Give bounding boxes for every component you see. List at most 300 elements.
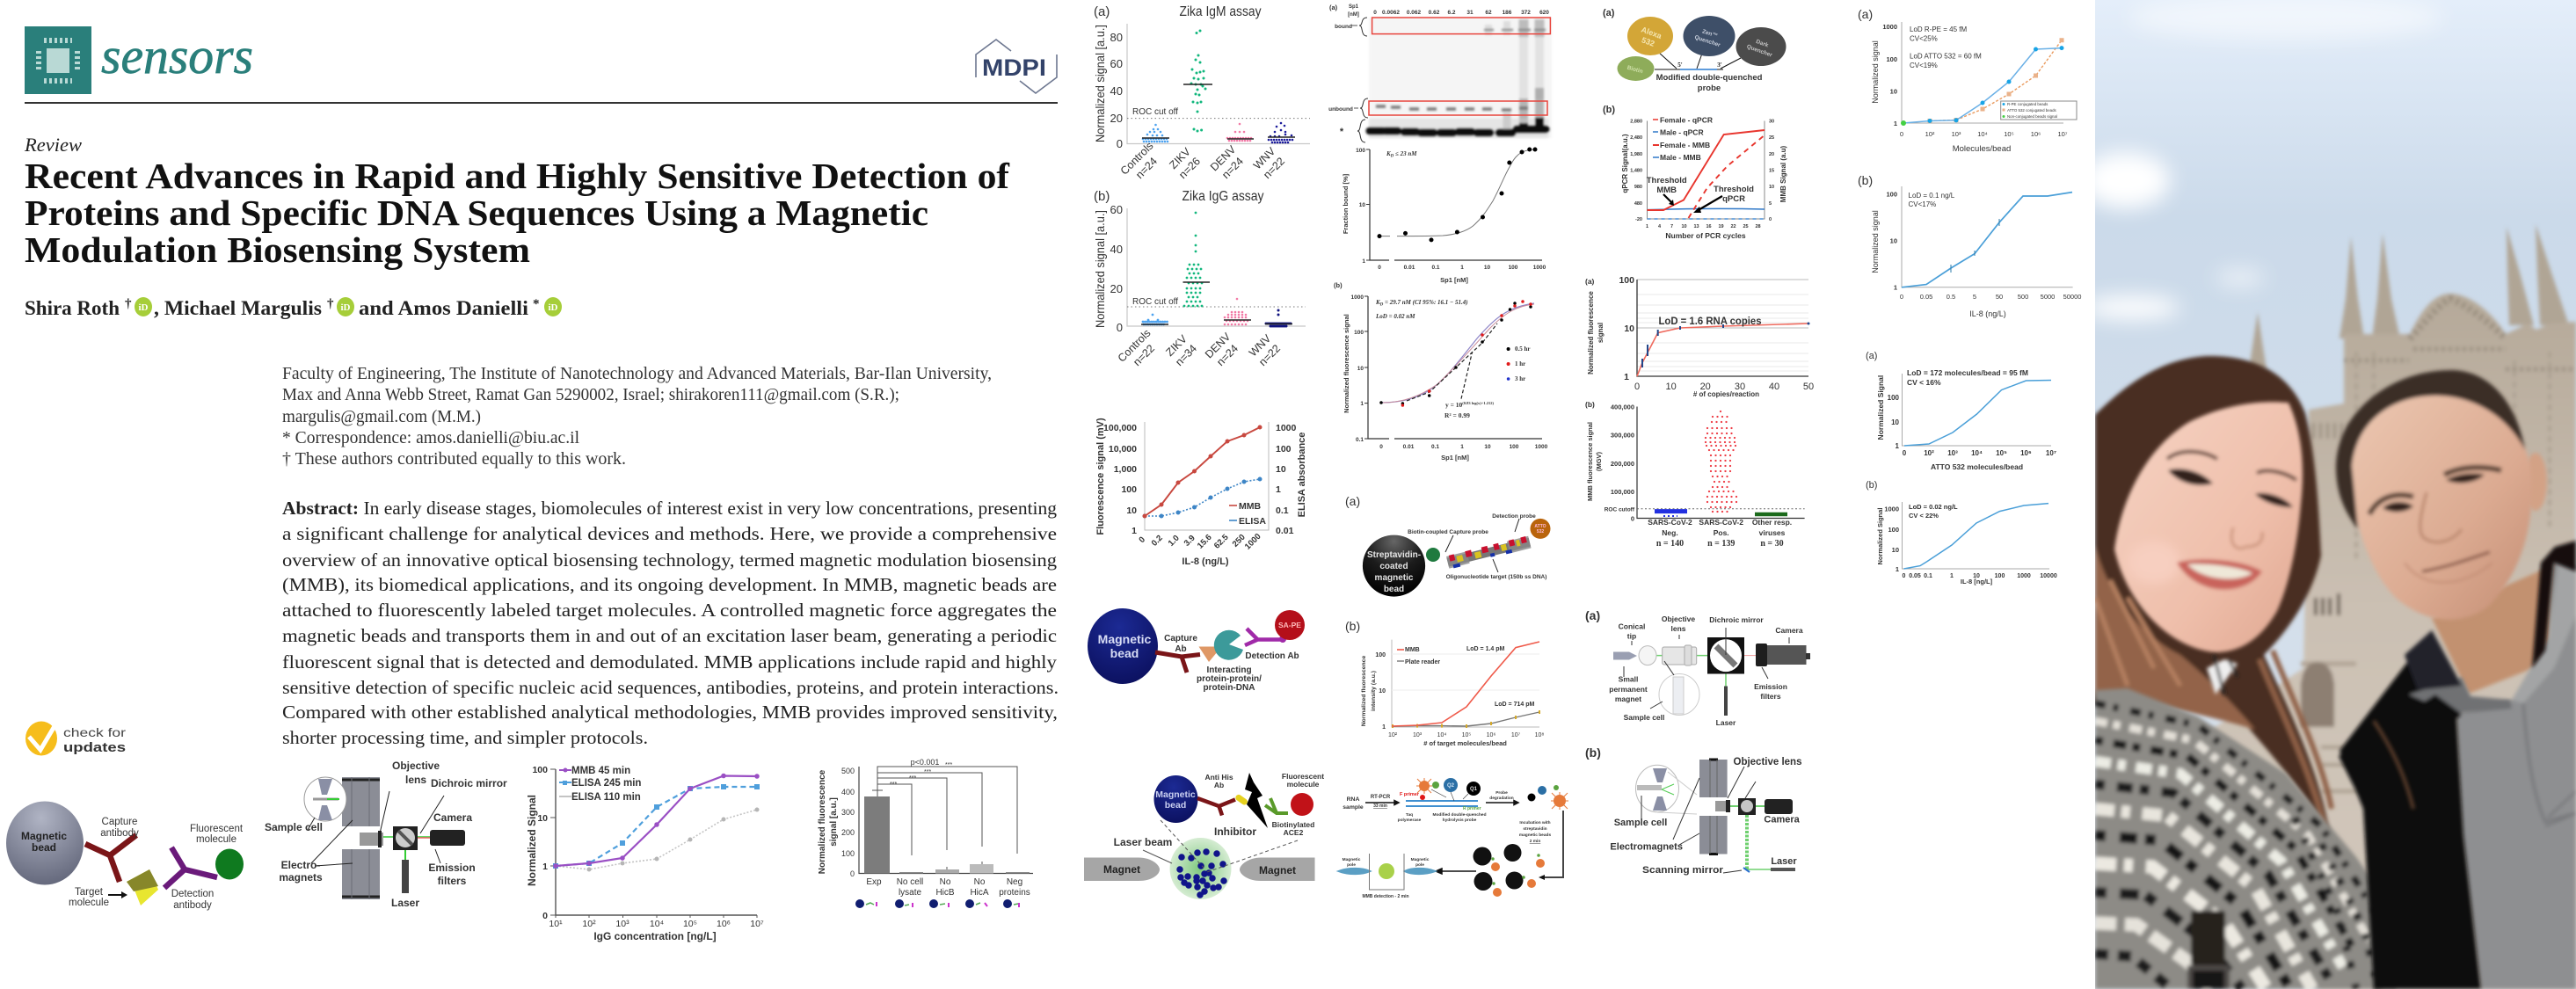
chart: MMB vs plate reader: Normalized fluorescence [1361, 656, 1367, 726]
chart: qPCR vs MMB signal: 1 [1646, 224, 1648, 229]
chart: IL-8 low concentration: 100 [1995, 573, 2005, 579]
diagram: RT-PCR workflow: hydrolysis probe [1443, 818, 1477, 823]
chart: bar chart protein interaction: Normalized fluorescence [818, 769, 827, 874]
diagram: streptavidin bead DNA probe: ATTO [1534, 524, 1546, 529]
diagram: MMB assay sandwich: Magnetic [21, 830, 67, 842]
chart: normalized fluorescence vs Sp1: 0.1 [1356, 437, 1364, 443]
chart: ATTO 532 molecules per bead: 10⁶ [2020, 449, 2032, 457]
chart: Zika IgG assay: Zika IgG assay [1182, 189, 1264, 204]
chart: MMB vs plate reader: MMB [1405, 647, 1420, 653]
chart: Zika IgG assay: n=22 [1131, 342, 1157, 368]
chart: IL-8 low concentration: 1000 [2017, 573, 2031, 579]
diagram: MMB optical setup: magnets [279, 871, 323, 884]
chart: IL-8 normalized signal: Normalized signal [1871, 210, 1880, 273]
abstract: Compared with other established analytical methodologies, MMB provides improved sensitivity, [282, 702, 1058, 723]
diagram: streptavidin bead DNA probe: Streptavidin- [1367, 550, 1421, 560]
chart: R-PE vs ATTO 532 beads: 10⁷ [2057, 130, 2068, 138]
MMB detection cell [1340, 854, 1434, 899]
authors: , Michael Margulis [154, 297, 322, 319]
diagram: modified double-quenched probe: Quencher [1746, 44, 1773, 59]
chart: MMB vs plate reader: LoD = 1.4 pM [1466, 646, 1505, 652]
legend: Female - MMB [1660, 141, 1710, 149]
series: MMB [1145, 427, 1260, 516]
MMB detection cell: pole [1415, 862, 1424, 868]
chart: fraction bound: K [1386, 150, 1391, 157]
chart: SARS-CoV-2 MMB scatter: Pos. [1714, 528, 1729, 537]
target molecule [69, 869, 158, 908]
diagram: bead assay protein interaction: Ab [1175, 644, 1187, 654]
diagram: RT-PCR workflow: streptavidin [1523, 826, 1547, 832]
chart: MMB vs plate reader: (b) [1345, 619, 1360, 633]
chart: bar chart protein interaction: No cell [897, 877, 923, 887]
chart: normalized fluorescence vs Sp1: 100 [1510, 444, 1519, 450]
chart: IL-8 MMB vs ELISA: 1,000 [1114, 464, 1137, 475]
affiliations: * Correspondence: amos.danielli@biu.ac.il [282, 428, 579, 447]
detection antibody: antibody [173, 900, 212, 911]
probe labels: Q2 [1447, 783, 1455, 789]
chart: IL-8 normalized signal: 5000 [2041, 293, 2055, 301]
chart: ATTO 532 molecules per bead: Normalized Signal [1876, 375, 1885, 440]
chart: Zika IgM assay: (a) [1094, 4, 1110, 19]
diagram: modified double-quenched probe: Biotin [1626, 65, 1643, 75]
chart: IL-8 normalized signal: 50000 [2063, 293, 2081, 301]
abstract: shorter processing time, and simpler protocols. [282, 727, 648, 748]
abstract: Abstract: In early disease stages, biomolecules of interest exist in very low concentrations, presenting [282, 498, 1057, 519]
diagram: portable MMB optics: Conical [1619, 622, 1645, 631]
MMB detection cell: Magnetic [1343, 857, 1361, 862]
chart: bar chart protein interaction: 300 [841, 808, 855, 817]
diagram: RT-PCR workflow: 33 min [1373, 804, 1387, 809]
series: plate reader [1392, 712, 1539, 726]
chart: qPCR vs MMB signal: (b) [1603, 105, 1615, 115]
chart: Zika IgM assay: n=22 [1261, 155, 1287, 181]
chart: IgG concentration line chart: 10¹ [549, 919, 563, 929]
chart: bar chart protein interaction: signal [a.u.] [829, 797, 839, 847]
diagram: portable MMB optics: lens [1670, 624, 1686, 633]
chart: bar chart protein interaction: Exp [866, 877, 882, 887]
dots: ZIKV [1191, 31, 1205, 131]
gel electrophoresis: 6.2 [1447, 10, 1456, 16]
series: ATTO 532 [1930, 40, 2062, 121]
chart: bar chart protein interaction: No [940, 877, 951, 887]
chart: IL-8 normalized signal [1858, 173, 2081, 318]
chart: IL-8 MMB vs ELISA: 10 [1126, 505, 1137, 516]
chart: Zika IgG assay: 20 [1110, 282, 1123, 295]
chart: IgG concentration line chart: 0 [542, 911, 548, 921]
chart: IL-8 low concentration: 10 [1973, 573, 1980, 579]
diagram: MMB optical setup [265, 760, 507, 909]
chart: bar chart protein interaction: HicB [935, 888, 955, 898]
significance brackets [877, 767, 1017, 855]
gel electrophoresis: unbound [1328, 106, 1353, 113]
chart: ATTO 532 molecules per bead: 1 [1896, 442, 1900, 450]
magnets [1084, 858, 1315, 881]
cathedral [2198, 224, 2576, 989]
chart: R-PE vs ATTO 532 beads: 0 [1900, 130, 1903, 138]
chart: Zika IgM assay: 40 [1110, 84, 1123, 98]
dots: DENV [1225, 299, 1250, 324]
chart: ATTO 532 molecules per bead [1866, 351, 2056, 471]
abstract: attached to fluorescently labeled target molecules. A controlled magnetic force aggregates the [282, 600, 1057, 621]
chart: normalized fluorescence vs Sp1: 100 [1354, 330, 1364, 336]
woman: face [2114, 402, 2303, 652]
chart: IL-8 MMB vs ELISA: 0.01 [1276, 526, 1294, 536]
chart: bar chart protein interaction: 200 [841, 828, 855, 837]
gel electrophoresis: bound [1335, 24, 1352, 30]
chart: qPCR vs MMB signal: 10 [1681, 224, 1687, 229]
chart: normalized fluorescence vs Sp1: 10 [1484, 444, 1491, 450]
diagram: inhibitor assay with laser beam and magnets: Biotinylated [1272, 820, 1314, 829]
legend box: R-PE conjugated beads [2007, 102, 2048, 106]
chart: IL-8 low concentration: 10 [1892, 546, 1899, 554]
diagram: RT-PCR workflow: Modified double-quenched [1432, 812, 1487, 818]
chart: bar chart protein interaction: 100 [841, 849, 855, 858]
threshold callouts [1647, 176, 1754, 213]
diagram: streptavidin bead DNA probe: Biotin-coupled Capture probe [1408, 529, 1488, 535]
chart: Zika IgM assay: n=24 [1133, 155, 1160, 181]
diagram: bead assay protein interaction: Detection Ab [1245, 651, 1299, 661]
man: neck [2432, 567, 2549, 694]
chart: SARS-CoV-2 MMB scatter [1585, 400, 1805, 549]
chart: IL-8 MMB vs ELISA: 0 [1137, 534, 1147, 545]
affiliations: margulis@gmail.com (M.M.) [282, 407, 481, 426]
chart: fraction bound: 1 [1362, 258, 1365, 265]
legend box [2001, 101, 2077, 120]
chart: normalized fluorescence vs Sp1: 10 [1357, 366, 1364, 372]
chart: qPCR vs MMB signal: 980 [1634, 185, 1642, 190]
chart: normalized fluorescence vs Sp1: y = 10 [1445, 401, 1462, 409]
chart: bar chart protein interaction: 0 [850, 869, 855, 878]
chart: IgG concentration line chart: 10³ [615, 919, 629, 929]
chart: IL-8 normalized signal: (b) [1858, 173, 1873, 187]
chart: qPCR vs MMB signal: 480 [1634, 201, 1642, 207]
chart: LoD RNA copies: 1 [1624, 372, 1629, 382]
dots: SARS-CoV-2 positive [1706, 411, 1739, 512]
chart: IL-8 MMB vs ELISA: 250 [1231, 533, 1248, 549]
chart: ATTO 532 molecules per bead: CV < 16% [1907, 378, 1941, 387]
chart: IgG concentration line chart: 10⁶ [717, 919, 731, 929]
MMB detection cell: pole [1347, 862, 1356, 868]
diagram: RT-PCR workflow: polymerase [1398, 818, 1422, 823]
diagram: bead assay protein interaction [1088, 608, 1305, 693]
chart: IgG concentration line chart [526, 765, 764, 942]
dots: other respiratory viruses [1755, 513, 1787, 516]
diagram: modified double-quenched probe [1603, 8, 1786, 93]
diagram: portable MMB optics [1585, 608, 1810, 727]
chart: qPCR vs MMB signal: 4 [1658, 224, 1662, 229]
chart: MMB vs plate reader: 10⁷ [1511, 732, 1521, 738]
chart: fraction bound: 0 [1378, 265, 1381, 271]
fluorescent molecule: Fluorescent [190, 824, 244, 834]
chart: SARS-CoV-2 MMB scatter: (MGV) [1595, 451, 1603, 471]
chart: MMB vs plate reader: 10⁶ [1487, 732, 1495, 738]
chart: ATTO 532 molecules per bead: 0 [1903, 449, 1907, 457]
diagram: RT-PCR workflow: Taq [1406, 812, 1413, 818]
chart: Zika IgG assay: Controls [1116, 327, 1153, 365]
chart: Zika IgM assay: Controls [1118, 140, 1156, 178]
chart: R-PE vs ATTO 532 beads: 10² [1925, 130, 1935, 138]
chart: SARS-CoV-2 MMB scatter: 400,000 [1611, 403, 1634, 411]
diagram: MMB optical setup: Electro- [281, 859, 320, 871]
chart: IL-8 low concentration [1866, 480, 2057, 585]
diagram: MMB optical setup: Emission [428, 862, 476, 874]
red boxes [1369, 18, 1550, 115]
chart: LoD RNA copies: 30 [1735, 382, 1745, 392]
chart: qPCR vs MMB signal: 2,880 [1630, 120, 1642, 125]
chart: IL-8 normalized signal: IL-8 (ng/L) [1969, 309, 2006, 318]
chart: SARS-CoV-2 MMB scatter: SARS-CoV-2 [1699, 518, 1743, 527]
icon: sensors journal logo [25, 26, 91, 94]
diagram: RT-PCR workflow: degradation [1489, 796, 1514, 801]
chart: SARS-CoV-2 MMB scatter: Neg. [1662, 528, 1678, 537]
dots: SARS-CoV-2 negative [1655, 509, 1687, 513]
affiliations: Max and Anna Webb Street, Ramat Gan 5290002, Israel; shirakoren111@gmail.com (S.R.); [282, 385, 899, 404]
chart: LoD RNA copies: 0 [1634, 382, 1640, 392]
chart: fraction bound: 10 [1359, 202, 1365, 208]
affiliations [282, 364, 992, 469]
legend box: ATTO 532 conjugated beads [2007, 108, 2057, 113]
chart: fraction bound [1342, 148, 1546, 284]
diagram: RT-PCR workflow [1340, 778, 1568, 899]
chart: Zika IgM assay: ZIKV [1167, 145, 1193, 171]
chart: MMB vs plate reader: # of target molecules/bead [1423, 739, 1507, 747]
chart: bar chart protein interaction: *** [945, 762, 952, 768]
man: ear [2529, 452, 2548, 512]
diagram: modified double-quenched probe: probe [1698, 84, 1721, 93]
chart: IL-8 MMB vs ELISA: MMB [1239, 501, 1261, 512]
chart: MMB vs plate reader: 100 [1375, 652, 1386, 658]
chart: R-PE vs ATTO 532 beads: 1000 [1882, 23, 1897, 31]
diagram: portable MMB optics: (a) [1585, 608, 1600, 622]
clouds [2082, 0, 2444, 319]
chart: qPCR vs MMB signal: 13 [1693, 224, 1699, 229]
man: face [2336, 370, 2532, 620]
diagram: inhibitor assay with laser beam and magnets: Fluorescent [1282, 772, 1324, 781]
chart: Zika IgM assay [1094, 4, 1310, 181]
chart: bar chart protein interaction: proteins [999, 888, 1030, 898]
authors: iD [341, 302, 351, 313]
diagram: inhibitor assay with laser beam and magnets: molecule [1287, 780, 1320, 789]
chart: IL-8 MMB vs ELISA: IL-8 (ng/L) [1182, 556, 1229, 567]
chart: bar chart protein interaction: 400 [841, 788, 855, 796]
gel electrophoresis: 620 [1539, 10, 1549, 16]
chart: LoD RNA copies: Normalized fluorescence [1587, 291, 1595, 375]
chart: ATTO 532 molecules per bead: 10⁷ [2046, 449, 2056, 457]
chart: normalized fluorescence vs Sp1: (b) [1334, 281, 1343, 289]
chart: IL-8 low concentration: CV < 22% [1909, 512, 1939, 520]
icon: check for updates: check for [63, 725, 126, 739]
chart: IL-8 MMB vs ELISA: 1 [1132, 526, 1137, 536]
diagram: bead assay protein interaction: Capture [1164, 634, 1197, 644]
diagram: portable MMB optics: tip [1627, 631, 1636, 640]
chart: MMB vs plate reader: 10⁴ [1437, 732, 1446, 738]
probe labels [1416, 778, 1481, 801]
chart: Zika IgG assay: n=24 [1214, 342, 1241, 368]
chart: IgG concentration line chart: 10 [537, 813, 548, 824]
chart: R-PE vs ATTO 532 beads: 10⁴ [1977, 130, 1988, 138]
dots: WNV [1269, 123, 1294, 142]
target molecule: Target [75, 887, 104, 898]
chart: IgG concentration line chart: 10⁵ [683, 919, 697, 929]
chart: IL-8 low concentration: Normalized Signal [1876, 507, 1884, 565]
chart: bar chart protein interaction: Neg [1007, 877, 1022, 887]
woman: loose hair strand over jacket [2374, 721, 2413, 809]
chart: qPCR vs MMB signal: 0 [1769, 217, 1772, 222]
chart: fraction bound: ≤ 23 nM [1394, 150, 1417, 157]
affiliations: Faculty of Engineering, The Institute of Nanotechnology and Advanced Materials, Bar-Ilan University, [282, 364, 992, 383]
chart: ATTO 532 molecules per bead: 100 [1888, 394, 1900, 402]
chart: SARS-CoV-2 MMB scatter: Other resp. [1752, 518, 1792, 527]
chart: LoD RNA copies: (a) [1585, 277, 1595, 286]
diagram: portable MMB optics: Emission [1754, 682, 1787, 691]
diagram: modified double-quenched probe: 3' [1717, 62, 1722, 69]
chart: IL-8 normalized signal: 500 [2018, 293, 2028, 301]
chart: normalized fluorescence vs Sp1: LoD = 0.02 nM [1375, 313, 1415, 320]
diagram: improved MMB optics with scanning mirror: Objective lens [1734, 757, 1801, 767]
series: R-PE [1901, 48, 2062, 126]
dots: ZIKV [1184, 213, 1204, 306]
diagram: portable MMB optics: Laser [1716, 718, 1736, 727]
chart: MMB vs plate reader: 10⁸ [1535, 732, 1544, 738]
chart: Zika IgG assay: 40 [1110, 243, 1123, 256]
chart: fraction bound: 100 [1509, 265, 1518, 271]
chart: IL-8 low concentration: 1 [1950, 573, 1954, 579]
gel electrophoresis: 0.0062 [1382, 10, 1400, 16]
MMB detection cell: Magnetic [1411, 857, 1430, 862]
fluorescent molecule [190, 824, 244, 879]
diagram: improved MMB optics with scanning mirror: Camera [1764, 814, 1801, 825]
chart: IL-8 normalized signal: 100 [1886, 190, 1897, 199]
chart: IL-8 low concentration: 1 [1896, 565, 1899, 573]
diagram: improved MMB optics with scanning mirror [1585, 745, 1801, 876]
chart: Zika IgG assay: n=34 [1173, 342, 1199, 368]
chart: R-PE vs ATTO 532 beads: Normalized signal [1871, 40, 1880, 104]
chart: LoD RNA copies [1585, 275, 1814, 398]
chart: LoD RNA copies: 40 [1769, 382, 1779, 392]
chart: LoD RNA copies: # of copies/reaction [1693, 390, 1759, 398]
dots: WNV [1266, 310, 1292, 326]
diagram: RT-PCR workflow: magnetic beads [1519, 833, 1551, 838]
paper header [24, 26, 1059, 756]
chart: qPCR vs MMB signal: 7 [1670, 224, 1673, 229]
diagram: modified double-quenched probe: Dark [1755, 39, 1770, 49]
chart: LoD RNA copies: 20 [1700, 382, 1711, 392]
diagram: streptavidin bead DNA probe: 532 [1537, 529, 1544, 534]
chart: normalized fluorescence vs Sp1: 3 hr [1515, 375, 1525, 382]
chart: fraction bound: 10 [1484, 265, 1490, 271]
sky [2095, 0, 2576, 989]
chart: qPCR vs MMB signal: 30 [1769, 120, 1774, 125]
diagram: MMB optical setup: Camera [433, 811, 472, 824]
capture antibody [85, 817, 139, 882]
abstract [282, 498, 1059, 748]
gel electrophoresis: Sp1 [1349, 4, 1359, 10]
chart: R-PE vs ATTO 532 beads: CV<19% [1910, 62, 1938, 69]
diagram: inhibitor assay with laser beam and magnets: Anti His [1204, 773, 1233, 782]
probe labels: Q1 [1470, 787, 1478, 792]
gel electrophoresis: 62 [1485, 10, 1492, 16]
chart: IL-8 MMB vs ELISA: 0.2 [1150, 534, 1165, 549]
chart: R-PE vs ATTO 532 beads: (a) [1858, 7, 1873, 21]
chart: Zika IgM assay: 0 [1117, 137, 1123, 150]
diagram: MMB optical setup: Objective [392, 760, 440, 772]
diagram: bead assay protein interaction: SA-PE [1278, 621, 1301, 629]
chart: SARS-CoV-2 MMB scatter: viruses [1759, 528, 1786, 537]
legend: Female - qPCR [1660, 116, 1713, 125]
magnetic beads [1474, 844, 1523, 891]
chart: IL-8 low concentration: 0 [1903, 573, 1906, 579]
authors: † [125, 297, 132, 311]
chart: fraction bound: 100 [1356, 148, 1365, 154]
chart: normalized fluorescence vs Sp1: 1000 [1351, 295, 1364, 301]
chart: IgG concentration line chart: 100 [532, 765, 548, 775]
chart: normalized fluorescence vs Sp1: 1 [1360, 401, 1364, 407]
diagram: inhibitor assay with laser beam and magnets: Ab [1214, 781, 1224, 789]
dots: DENV [1227, 124, 1253, 141]
chart: IL-8 low concentration: 10000 [2040, 573, 2057, 579]
chart: Zika IgG assay: 60 [1110, 203, 1123, 216]
chart: bar chart protein interaction: *** [890, 782, 897, 788]
chart: qPCR vs MMB signal: 15 [1769, 169, 1774, 174]
chart: qPCR vs MMB signal: 19 [1718, 224, 1724, 229]
chart: bar chart protein interaction: No [974, 877, 986, 887]
series: ELISA [1145, 479, 1260, 516]
chart: IL-8 MMB vs ELISA: 3.9 [1182, 534, 1197, 549]
chart: IL-8 normalized signal: 5 [1973, 293, 1976, 301]
chart: normalized fluorescence vs Sp1: Sp1 [nM] [1441, 454, 1469, 462]
threshold callouts: qPCR [1722, 194, 1745, 204]
threshold callouts: Threshold [1647, 176, 1687, 185]
capture antibody: Capture [102, 817, 137, 827]
chart: ATTO 532 molecules per bead: 10⁵ [1996, 449, 2007, 457]
icon: check for updates [25, 721, 126, 756]
title: Proteins and Specific DNA Sequences Using a Magnetic [25, 193, 928, 233]
chart: IL-8 MMB vs ELISA: 15.6 [1196, 533, 1214, 551]
diagram: MMB optical setup: lens [405, 774, 426, 786]
legend [1653, 116, 1713, 162]
chart: MMB vs plate reader: Plate reader [1405, 659, 1440, 665]
magnets: Magnet [1103, 863, 1140, 876]
chart: fraction bound: Sp1 [nM] [1440, 276, 1468, 284]
chart: normalized fluorescence vs Sp1 [1334, 281, 1548, 462]
chart: qPCR vs MMB signal: 16 [1706, 224, 1712, 229]
chart: SARS-CoV-2 MMB scatter: 300,000 [1611, 432, 1634, 440]
chart: IgG concentration line chart: 10² [582, 919, 596, 929]
diagram: MMB assay sandwich [6, 802, 244, 911]
diagram: MMB optical setup: Sample cell [265, 821, 323, 833]
chart: bar chart protein interaction: lysate [899, 888, 921, 898]
authors [25, 297, 562, 319]
title: Recent Advances in Rapid and Highly Sensitive Detection of [25, 156, 1010, 196]
chart: fraction bound: 1 [1460, 265, 1464, 271]
chart: qPCR vs MMB signal: 10 [1769, 185, 1774, 190]
diagram: inhibitor assay with laser beam and magnets [1084, 772, 1324, 899]
chart: MMB vs plate reader [1345, 619, 1544, 747]
chart: R-PE vs ATTO 532 beads: Molecules/bead [1953, 144, 2011, 154]
woman: long hair [2095, 356, 2332, 835]
chart: IL-8 MMB vs ELISA: ELISA absorbance [1297, 433, 1307, 517]
chart: R-PE vs ATTO 532 beads [1858, 7, 2077, 154]
photo: two researchers in front of Milan cathedral [2082, 0, 2576, 989]
legend: Male - MMB [1660, 153, 1701, 162]
chart: MMB vs plate reader: 10² [1388, 732, 1398, 738]
chart: IL-8 low concentration: 0.05 [1909, 573, 1921, 579]
authors: iD [549, 302, 558, 313]
chart: LoD RNA copies: 10 [1624, 324, 1634, 334]
chart: normalized fluorescence vs Sp1: = 29.7 nM (CI 95%: 16.1 − 51.4) [1383, 299, 1468, 306]
abstract: sensitive detection of specific nucleic acid sequences, antibodies, proteins, and protein interactions. [282, 677, 1059, 698]
gel electrophoresis [1328, 4, 1552, 142]
